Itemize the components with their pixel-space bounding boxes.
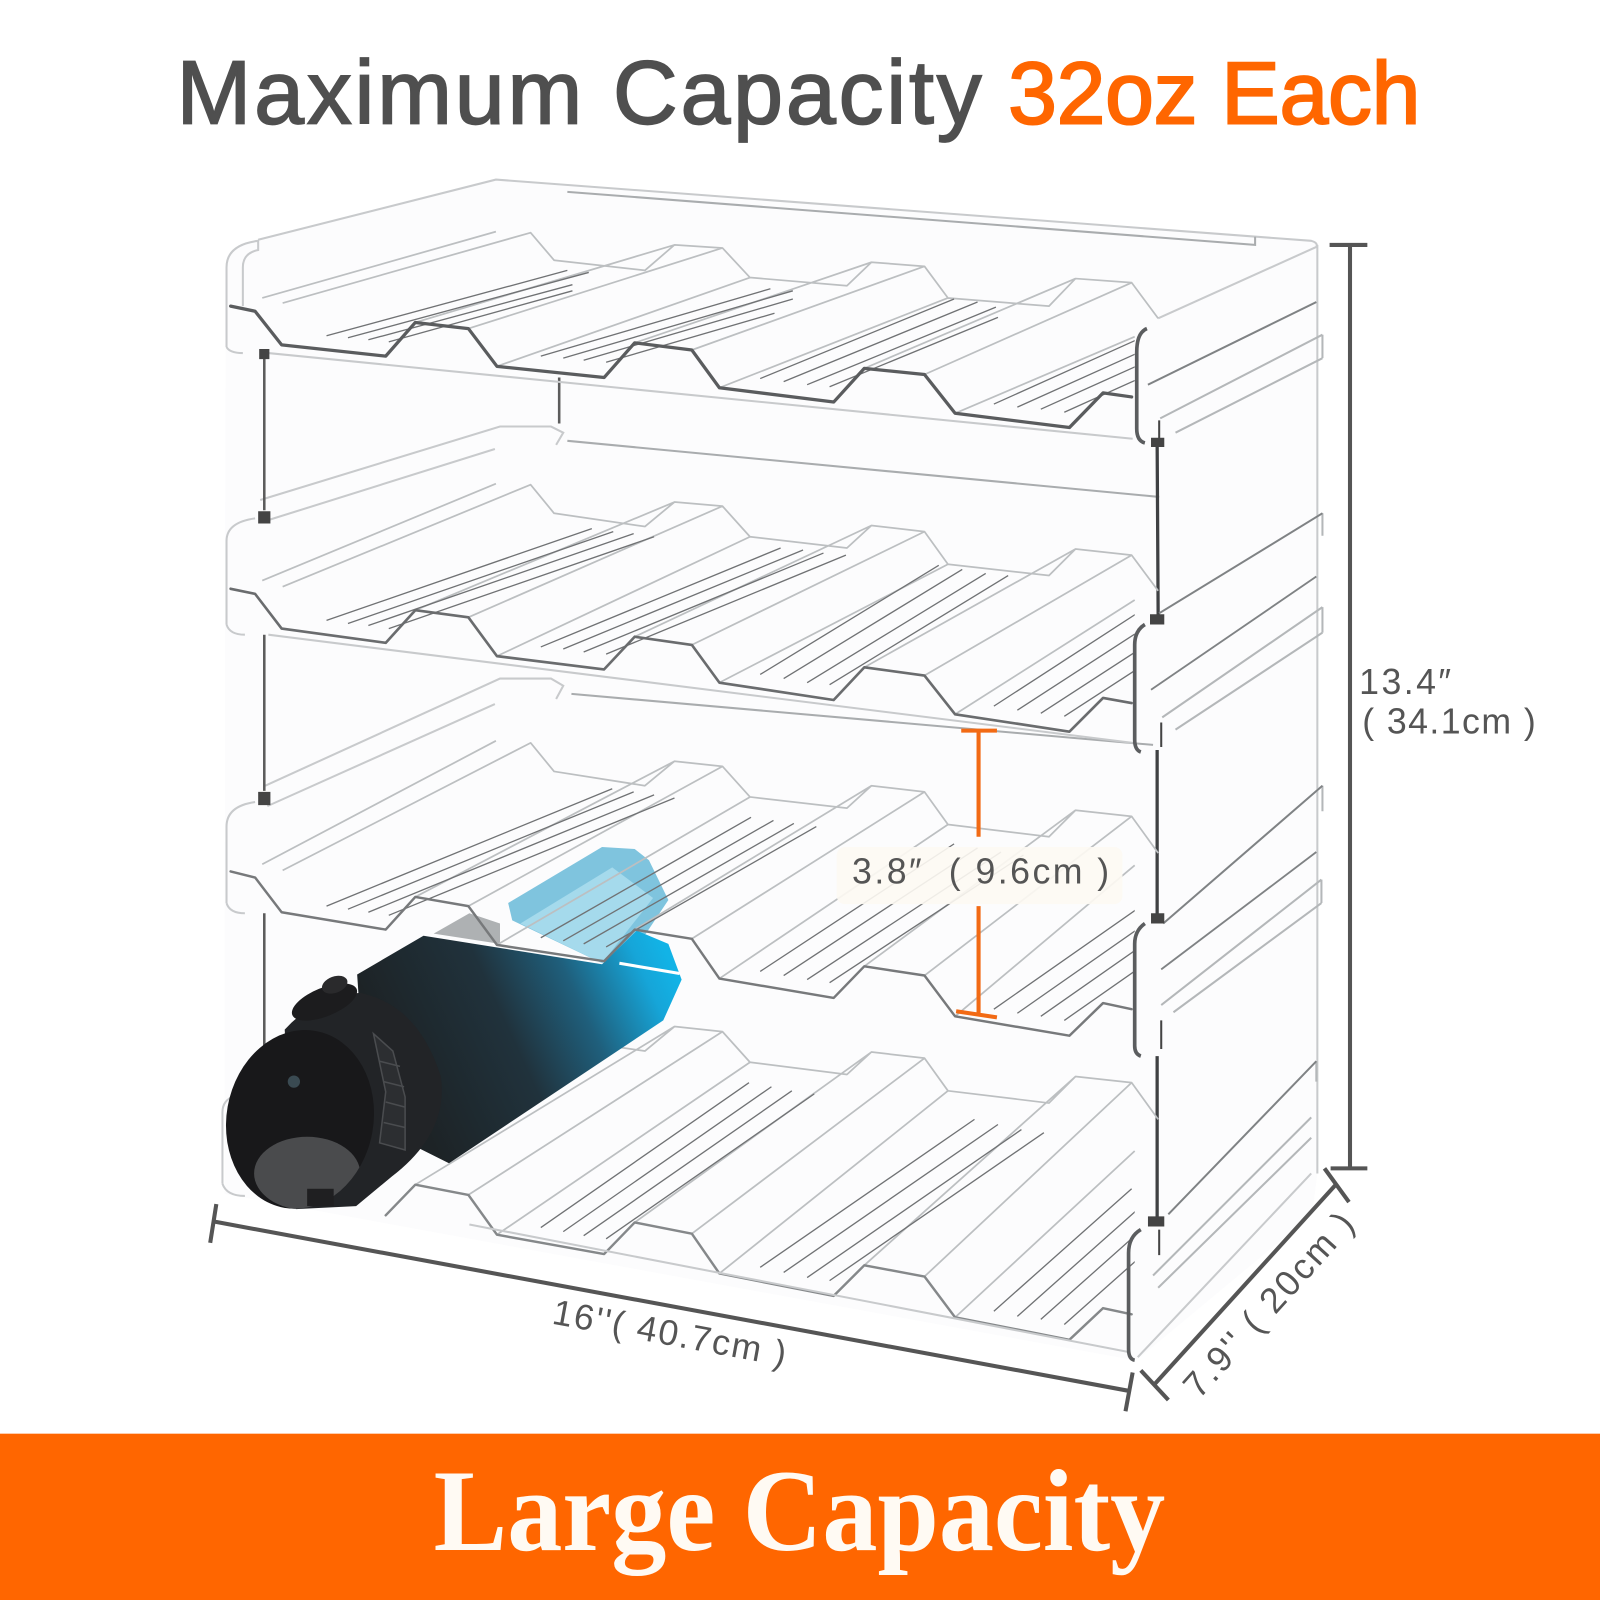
bottle grip <box>373 1034 405 1150</box>
width label: 16''( 40.7cm ) <box>550 1292 790 1374</box>
banner text: Large Capacity <box>434 1447 1165 1576</box>
width line <box>210 1204 1133 1411</box>
tier 2 stripes <box>326 528 1135 717</box>
bottle collar <box>285 993 442 1209</box>
tier 2 front profile <box>231 589 1132 732</box>
bottom banner <box>0 1434 1600 1600</box>
bottle shadowed top <box>434 913 500 944</box>
tier 3 front profile <box>231 871 1132 1036</box>
bottle cap face <box>212 1018 388 1221</box>
shelf tier 1 <box>231 232 1207 439</box>
tier 1 ridges <box>262 232 1158 413</box>
right posts <box>1157 443 1158 1219</box>
height label: 13.4″ <box>1359 662 1451 702</box>
joint hooks <box>259 350 1163 1255</box>
tier 4 front profile <box>386 1185 1132 1340</box>
cap pad <box>254 1137 360 1210</box>
wine rack product <box>212 180 1322 1360</box>
depth label: 7.9'' ( 20cm ) <box>1175 1204 1362 1405</box>
title: 32oz Each <box>1008 44 1420 142</box>
left side plates <box>222 241 258 1196</box>
cap latch <box>307 1189 334 1206</box>
height dimension <box>1330 245 1536 1168</box>
tier 4 lower edge <box>469 1224 1129 1352</box>
water bottle <box>212 847 682 1221</box>
bottle body <box>357 931 682 1163</box>
tier 2 lower edge <box>268 635 1133 743</box>
depth-gap dimension <box>837 731 1122 1017</box>
left back rails <box>260 427 563 806</box>
rack outer edges <box>258 180 1317 1357</box>
shelf tier 3 <box>231 741 1217 1036</box>
rack body backdrop <box>224 180 1317 1359</box>
bottle upper blue through shelf <box>508 847 668 963</box>
title: Maximum Capacity <box>177 43 982 143</box>
right side rails <box>1148 302 1322 1288</box>
cap knob <box>287 972 362 1028</box>
depth line <box>1141 1168 1349 1400</box>
width dimension <box>210 1204 1133 1411</box>
right front plates <box>1129 329 1147 1360</box>
gap dimension orange lines <box>956 731 997 1017</box>
tier 2 ridges <box>262 484 1158 714</box>
tier 3 ridges <box>262 741 1158 1016</box>
gap label: 3.8″ ( 9.6cm ) <box>852 852 1109 892</box>
tier 4 stripes <box>541 1083 1202 1324</box>
depth dimension <box>1141 1168 1362 1405</box>
back rails <box>567 192 1255 745</box>
tier 3 stripes <box>327 789 1217 1020</box>
left posts <box>264 353 559 1082</box>
shelf edge highlight <box>619 963 680 973</box>
shelf tier 2 <box>231 484 1233 743</box>
tier 1 lower edge <box>268 353 1133 439</box>
title <box>177 43 1420 143</box>
height line <box>1330 245 1367 1168</box>
shelf tier 4 <box>384 1026 1159 1353</box>
height dimension: ( 34.1cm ) <box>1362 702 1536 742</box>
cap dot <box>288 1076 300 1088</box>
gap label background <box>837 847 1122 904</box>
tier 1 stripes <box>327 270 1207 412</box>
tier 1 front profile <box>231 306 1132 428</box>
tier 4 ridges <box>262 1005 1158 1317</box>
